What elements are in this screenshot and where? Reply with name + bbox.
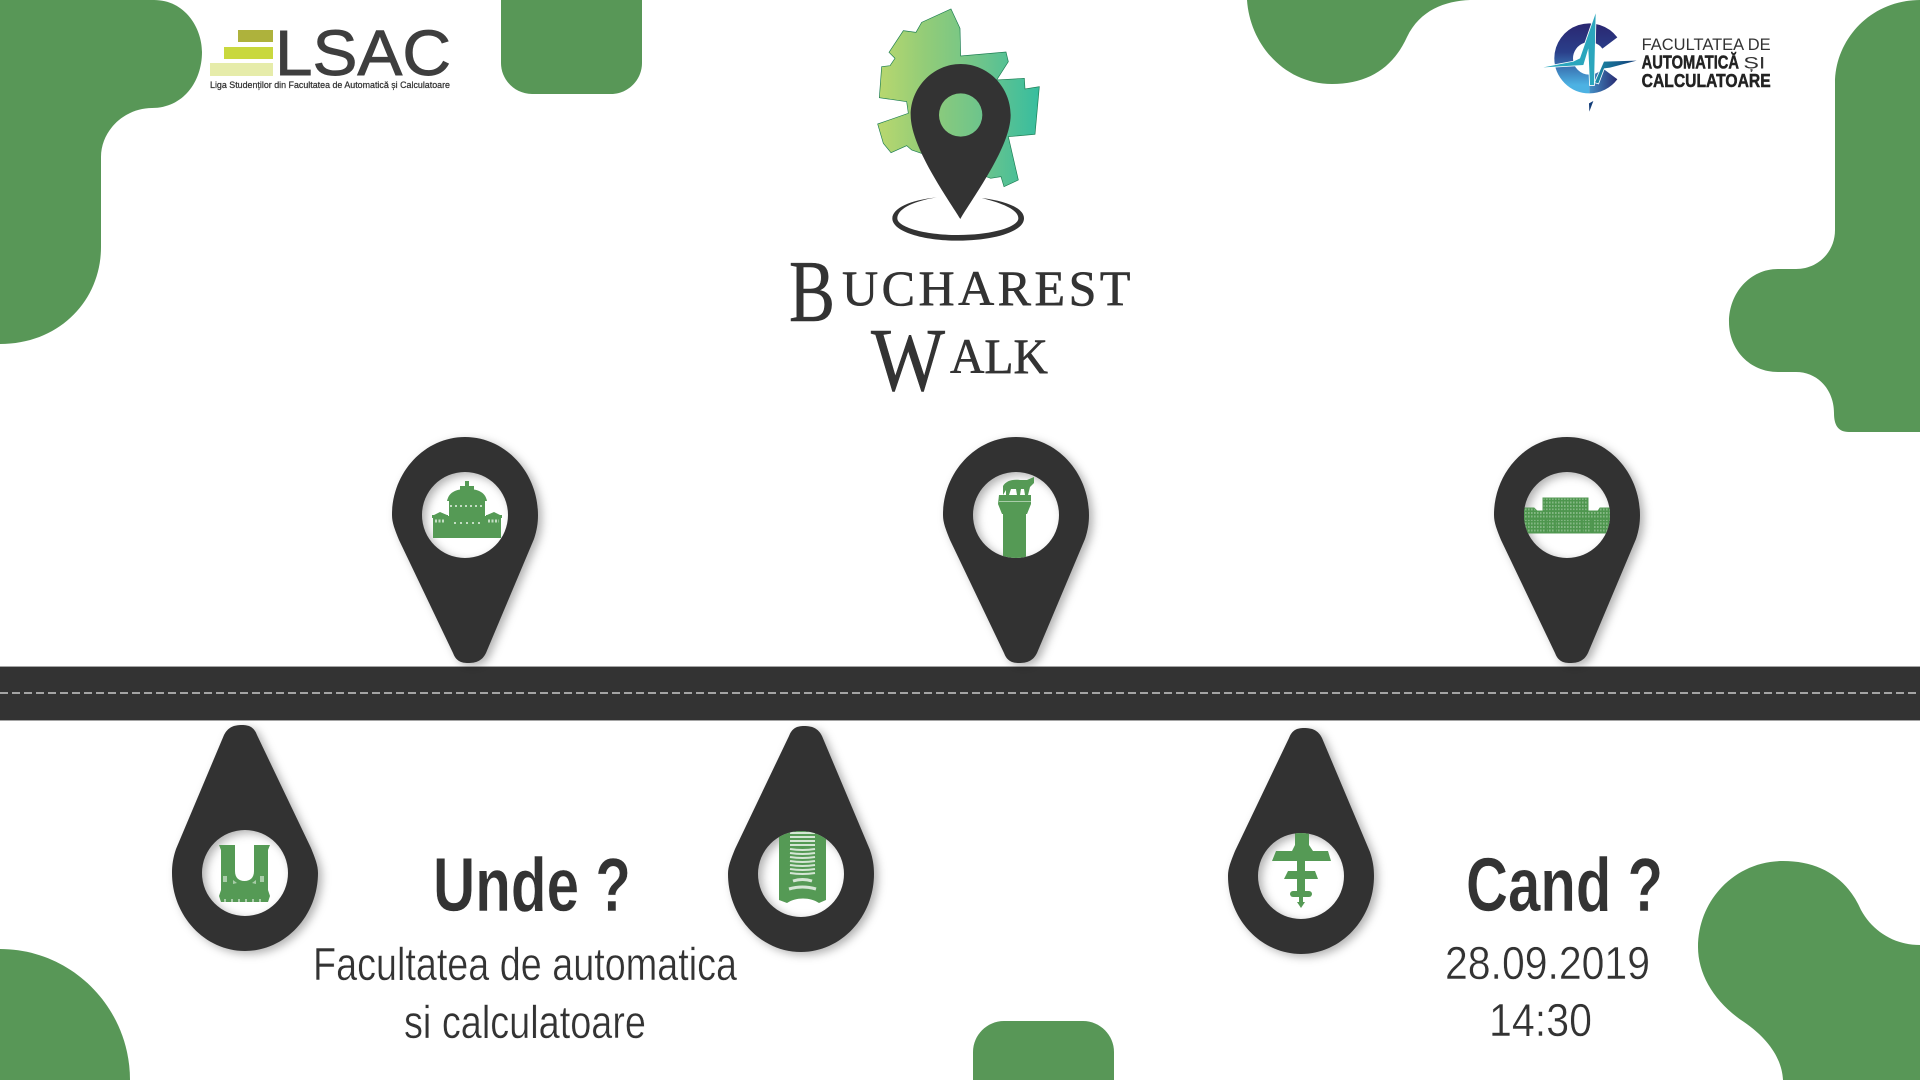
title line: Bucharest: UCHAREST bbox=[842, 260, 1134, 316]
pin body bbox=[172, 725, 318, 951]
icon: LSAC stair bars bbox=[210, 30, 273, 76]
location pin bbox=[911, 64, 1011, 219]
icon: column with wolf bbox=[998, 477, 1034, 560]
pin 3: Palace of Parliament bbox=[1494, 437, 1640, 663]
icon: curved tower bbox=[779, 830, 826, 903]
title line: Bucharest bbox=[789, 244, 1134, 341]
title line: Walk: ALK bbox=[950, 328, 1048, 384]
heading: Cand: Cand ? bbox=[1466, 843, 1663, 928]
faculty name: FACULTATEA DE bbox=[1642, 35, 1771, 54]
pin body bbox=[1228, 728, 1374, 954]
decorative blob: top right corner bbox=[1247, 0, 1470, 84]
title line: Walk: W bbox=[871, 311, 945, 410]
icon: compass C bbox=[1543, 13, 1637, 112]
heading: Unde: Unde ? bbox=[433, 843, 631, 928]
icon: tower with platforms bbox=[1272, 833, 1331, 908]
faculty name: CALCULATOARE bbox=[1642, 70, 1771, 91]
title: Bucharest Walk bbox=[789, 244, 1134, 410]
date and time: 14:30 bbox=[1489, 994, 1592, 1046]
location text: Facultatea de automatica bbox=[313, 938, 737, 990]
logo: Facultatea de Automatica si Calculatoare bbox=[1543, 13, 1771, 112]
pin centre dot bbox=[939, 93, 982, 137]
road bbox=[0, 666, 1920, 721]
decorative blob: bottom right bbox=[1698, 861, 1920, 1080]
section: Unde bbox=[313, 843, 737, 1048]
pin 6: TV tower bbox=[1228, 728, 1374, 954]
pin body bbox=[1494, 437, 1640, 663]
decorative blob: bottom left bbox=[0, 949, 130, 1080]
road centre dashes bbox=[0, 692, 1920, 694]
decorative blob: right side bbox=[1729, 0, 1920, 432]
date and time: 28.09.2019 bbox=[1445, 937, 1650, 989]
logo: LSAC bbox=[210, 17, 451, 91]
decorative tab: bottom bbox=[973, 1021, 1114, 1080]
decorative blob: top left bbox=[0, 0, 202, 344]
location text bbox=[313, 938, 737, 1048]
LSAC subtitle: Liga Studenților din Facultatea de Automatică și Calculatoare bbox=[210, 80, 450, 91]
logo: Bucharest Walk emblem bbox=[878, 9, 1039, 241]
pin 1: Romanian Athenaeum bbox=[392, 437, 538, 663]
section: Cand bbox=[1445, 843, 1663, 1046]
faculty name bbox=[1642, 35, 1771, 91]
pin 2: Capitoline Wolf column bbox=[943, 437, 1089, 663]
icon: domed building bbox=[432, 481, 502, 538]
ground ring bbox=[892, 197, 1024, 241]
LSAC wordmark: LSAC bbox=[275, 17, 451, 89]
pin 4: University building bbox=[172, 725, 318, 951]
map of Bucharest bbox=[878, 9, 1039, 187]
pin body bbox=[392, 437, 538, 663]
date and time bbox=[1445, 937, 1650, 1046]
pin 5: Intercontinental tower bbox=[728, 726, 874, 952]
title line: Bucharest: B bbox=[789, 244, 835, 341]
title line: Walk bbox=[871, 311, 1048, 410]
faculty name: ȘI bbox=[1743, 54, 1765, 73]
icon: U-shaped building bbox=[219, 845, 270, 902]
decorative tab: top bbox=[501, 0, 642, 94]
pin body bbox=[728, 726, 874, 952]
faculty name: AUTOMATICĂ bbox=[1642, 52, 1739, 73]
location text: si calculatoare bbox=[404, 996, 646, 1048]
icon: parliament palace bbox=[1524, 498, 1610, 533]
pin body bbox=[943, 437, 1089, 663]
